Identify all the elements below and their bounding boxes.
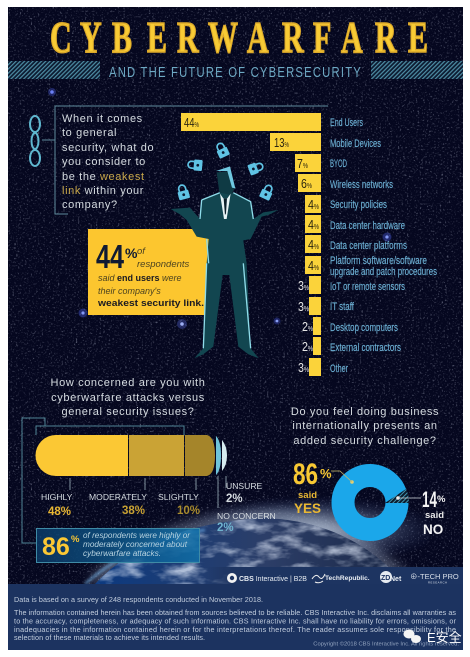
concern labels: HIGHLY [41,492,73,502]
stat: 14 percent no: % [437,494,446,505]
earth horizon [85,495,430,584]
callout: 86 percent concerned: cyberwarfare attacks. [83,549,161,558]
bar labels: Other [330,363,348,375]
footer text: to the accuracy, completeness, or adequacy of such information. CBS Interactive Inc. shall have no liability for errors, omissions, or [14,616,457,626]
concern labels: NO CONCERN [217,511,276,521]
stat: 14 percent no [422,487,446,537]
bar labels: Desktop computers [330,322,398,334]
logos [227,571,459,584]
bracket lines [22,418,184,543]
bar labels: IT staff [330,301,355,313]
callout: 86 percent concerned: 86 [42,533,70,561]
bar labels: End Users [330,117,363,129]
bar labels: Data center hardware [330,220,405,232]
callout: 44 percent: 44 [96,238,124,275]
icon: chain [30,116,40,166]
bar chart: weakest link: 3% [298,299,309,314]
bar labels: BYOD [330,158,347,170]
watermark: E安全: E安全 [427,630,462,645]
bar chart: weakest link: 4% [308,197,319,212]
bar chart: weakest link: 4% [308,217,319,232]
concern labels [41,476,276,534]
concern labels: 48% [48,506,71,518]
heading: doing business internationally: added security challenge? [293,435,437,447]
callout: 44 percent: of [137,246,146,257]
logos: Net [390,576,402,583]
bar chart: weakest link: 2% [302,339,313,354]
bar labels: Data center platforms [330,240,407,252]
concern labels: SLIGHTLY [158,492,199,502]
heading: doing business internationally: Do you feel doing business [291,406,439,418]
title: CYBERWARFARE [50,13,428,63]
bar chart: weakest link: 3% [298,360,309,375]
callout: 86 percent concerned: % [71,534,80,545]
heading: how concerned: cyberwarfare attacks versus [51,392,205,404]
icons: floating padlocks [176,141,275,201]
logo band [205,567,463,584]
bar chart: weakest link: 13% [274,135,289,150]
bar chart: weakest link: 4% [308,258,319,273]
subtitle with hatched bands [8,61,463,81]
bar labels: Security policies [330,199,387,211]
figure: businessman shrugging [171,166,278,358]
question: weakest link: company? [62,199,118,211]
bar labels: IoT or remote sensors [330,281,405,293]
bar chart: weakest link [181,113,321,376]
bar labels: Platform software/software [330,255,427,267]
heading: how concerned: How concerned are you with [51,377,205,389]
footer panel [8,584,463,650]
stat: 86 percent yes [293,458,332,516]
callout: 86 percent concerned: moderately concerned about [83,540,188,549]
footer text: The information contained herein has been obtained from sources believed to be reliable. CBS Interactive Inc. disclaims all warranties as [14,608,456,617]
callout: 44 percent: said end users were [98,273,182,283]
concern labels: 10% [177,505,200,517]
bar chart: weakest link: 7% [297,156,308,171]
question: weakest link: you consider to [62,156,146,168]
bar chart: weakest link: 2% [302,319,313,334]
question: weakest link: When it comes [62,113,143,125]
callout: 44 percent: weakest security link. [97,298,204,308]
concern labels: UNSURE [226,481,263,491]
bar labels [330,117,437,375]
logos: TechRepublic. [325,575,370,582]
concern labels: 38% [122,505,145,517]
callout: 86 percent concerned: of respondents were highly or [83,531,190,540]
concern labels: 2% [217,522,234,534]
callout: 44 percent: respondents [137,259,190,270]
footer text: inadequacies in the information contained herein or for the interpretations thereof. The reader assumes sole responsibility for the [14,625,456,634]
concern labels: MODERATELY [89,492,147,502]
bar labels: Mobile Devices [330,138,381,150]
stat: 86 percent yes: said [298,490,317,501]
stat: 14 percent no: said [425,510,444,521]
callout: 44 percent [88,229,210,315]
bar chart: weakest link: 4% [308,237,319,252]
question: weakest link: link within your [62,185,144,197]
bar chart: weakest link: 3% [298,278,309,293]
stat: 86 percent yes: % [320,466,332,481]
logos: ZD [381,575,390,582]
heading: doing business internationally: internationally presents an [292,420,438,432]
bar labels: External contractors [330,342,401,354]
bar chart: weakest link: 44% [184,115,199,130]
callout: 44 percent: % [125,245,138,261]
concern labels: 2% [226,493,243,505]
stat: 14 percent no: 14 [422,487,437,512]
stat: 14 percent no: NO [423,522,443,537]
callout: 44 percent: their company's [98,286,161,296]
donut chart: yes vs no [331,471,421,530]
stat: 86 percent yes: YES [294,500,321,516]
subtitle with hatched bands: AND THE FUTURE OF CYBERSECURITY [109,64,362,81]
logos: ⊕-TECH PRO [410,572,459,581]
bar labels: Wireless networks [330,179,393,191]
footer text: Copyright ©2018 CBS Interactive Inc. All rights reserved. [313,640,459,648]
heading: how concerned: general security issues? [62,406,194,418]
stat: 86 percent yes: 86 [293,458,318,491]
stacked bar: concern [35,435,227,476]
question: weakest link: be the weakest [62,171,145,183]
watermark: E安全 [404,630,462,645]
footer text: selection of these materials to achieve its intended results. [14,633,205,642]
footer text: Data is based on a survey of 248 respondents conducted in November 2018. [14,595,263,604]
logos: RESEARCH [428,580,448,584]
bar chart: weakest link: 6% [301,176,312,191]
footer text [14,595,459,648]
question: weakest link: to general [62,127,117,139]
question frame [42,106,328,214]
question: weakest link: security, what do [62,142,154,154]
logos: CBS Interactive | B2B [239,576,307,583]
callout: 86 percent concerned [36,528,200,562]
